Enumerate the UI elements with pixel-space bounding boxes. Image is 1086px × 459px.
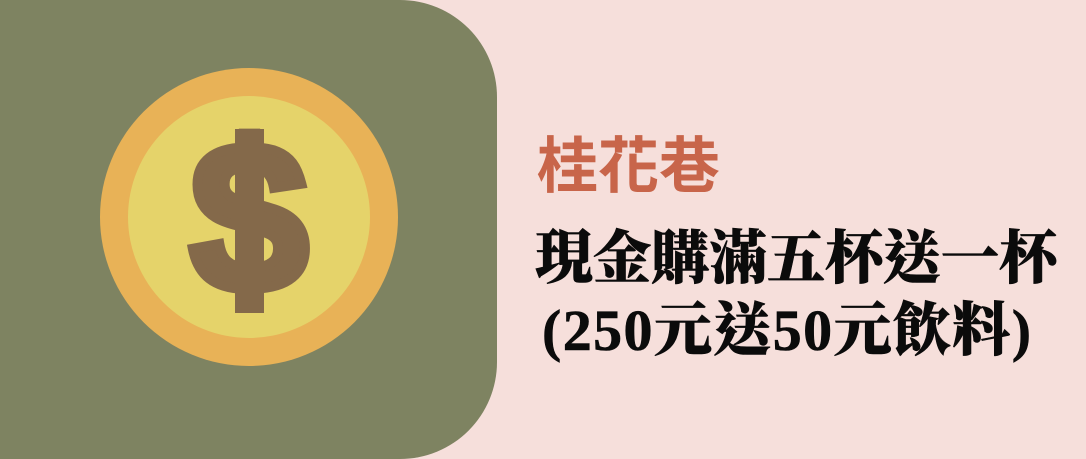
text block: cash promotion: (250元送50元飲料)	[542, 298, 1032, 363]
text block: cash promotion	[535, 226, 1057, 363]
heading: shop name: 桂花巷	[537, 132, 720, 200]
panel: green rounded background with coin	[0, 0, 497, 459]
text block: cash promotion: 現金購滿五杯送一杯	[535, 226, 1057, 291]
icon: dollar coin: $	[190, 99, 308, 336]
icon: dollar coin	[100, 68, 398, 366]
